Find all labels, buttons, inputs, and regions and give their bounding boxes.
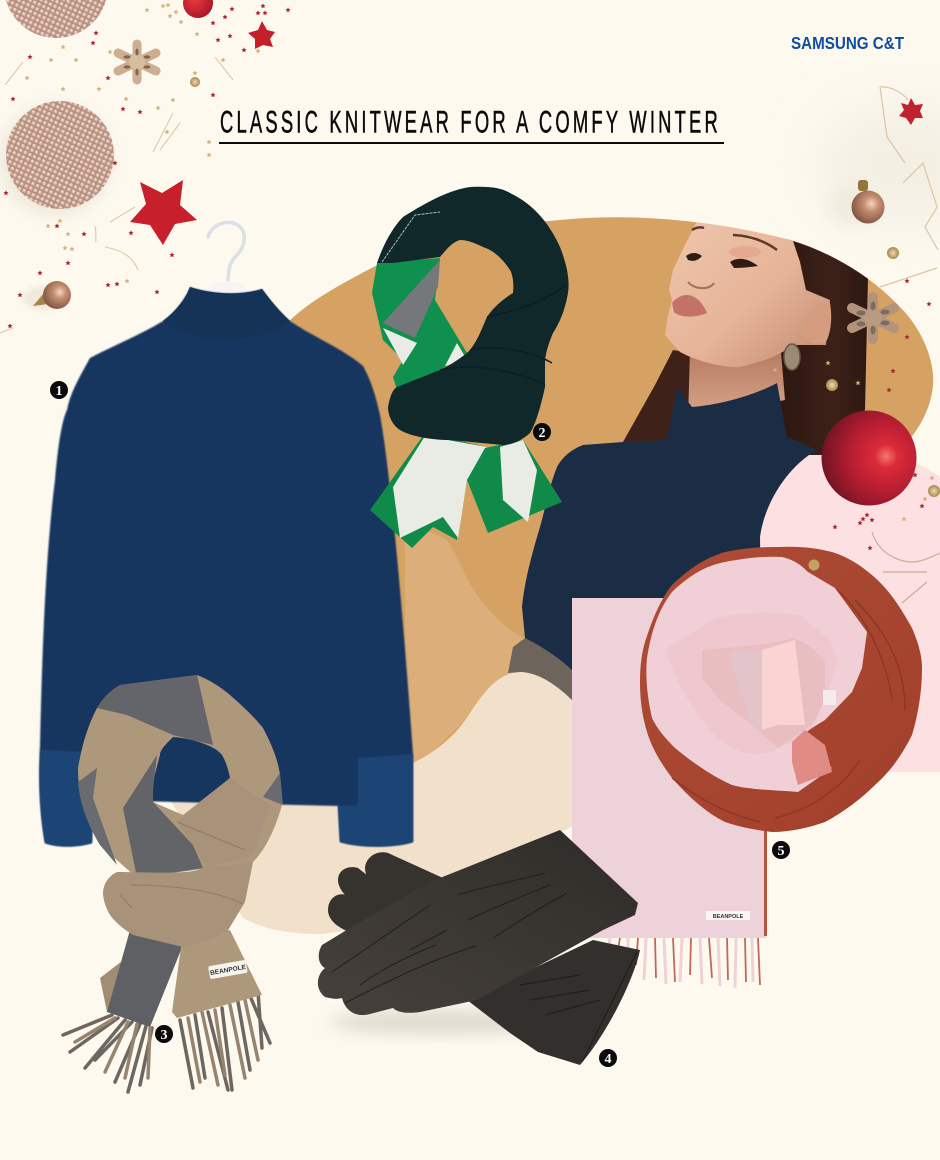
model: right eye [730,259,758,268]
brick loop: small tag [823,690,836,705]
brick loop: inner fold [665,613,838,754]
sweater: left cuff [40,750,93,846]
number 1: 1 [56,384,62,399]
decoration: red confetti stars [3,3,291,328]
decoration: sprigs right [880,87,938,287]
gloves: rear glove [467,940,640,1065]
scarf 2: argyle line [382,212,440,262]
number 5: 5 [778,844,784,859]
decoration: confetti on model and pink panel [772,278,940,550]
decoration: sprigs lower right [872,532,940,603]
decoration: gold confetti stars [24,2,261,283]
number 3 [155,1025,173,1043]
scarf 2: fold lines [440,285,566,385]
scarf 3: beige back tail [100,955,130,1012]
model: left brow [692,227,704,230]
brick loop: hollow [702,638,825,748]
model: neck [688,352,785,407]
model: hair left [623,350,692,445]
decoration: snowflake left [118,44,156,80]
pink scarf: label [706,911,750,920]
model: nose [688,282,714,288]
pink scarf: brick edge [764,820,767,936]
decoration: top-left bauble [4,0,108,38]
model: left eye [686,253,702,261]
brick loop: outer [640,547,922,832]
model: sweater [522,383,817,672]
scarf 3: upper right knot [177,778,270,868]
decoration: large red bauble [822,410,916,506]
model photo [508,215,875,702]
decoration: tiny gold bauble right [887,247,899,259]
gloves: rear glove creases [520,952,637,1062]
number 1 [50,381,68,399]
number 5 [772,841,790,859]
background blob: lighter tan fold [405,520,525,770]
logo: SAMSUNG C&T [791,33,904,53]
background: soft shadow upper right [820,105,940,225]
scarf 3: right fringe [180,992,270,1090]
decoration: small gold bauble [190,77,200,87]
model: head group [623,215,875,455]
decoration: bronze bauble right [828,180,884,225]
scarf 2: left tail white [393,436,487,538]
scarf 3: beige tail [172,930,262,1018]
scarf 3: grey right sliver [263,773,283,805]
model: grey under sweater [508,638,574,702]
sweater: hanger shoulders [203,281,250,292]
scarf 2: right tail white [500,440,537,522]
decoration: red bauble top [183,0,213,18]
scarf 2: white stripe [445,343,467,366]
decoration: gold sprigs left [0,57,233,333]
item 5: pink scarf with brick reverse [572,547,922,988]
number 3: 3 [160,1028,168,1043]
item 1: navy sweater [39,223,413,847]
model: eye shadow [729,246,761,258]
model: hair right [780,240,868,455]
scarf 2: white patch [383,328,417,365]
background blob: tan [285,217,933,770]
scarf 3: grey top band [97,675,213,745]
model: lips [672,295,707,317]
scarf 3: grey tail [107,930,185,1027]
sweater: hanger [208,223,244,284]
background blob: pale pink [760,446,940,772]
brick loop: salmon patch [792,730,832,785]
decoration: beaded red star [130,180,197,245]
sweater: body [39,287,413,846]
background blob: beige [170,672,574,934]
number 4 [599,1049,617,1067]
scarf 2: dark wrap [377,187,569,445]
pink scarf: flat panel [572,598,766,938]
model: ear [809,303,832,344]
scarf 3: grey outer strip [78,768,117,865]
item 2: green argyle scarf [370,187,569,548]
scarf 3: label: BEANPOLE [210,964,247,977]
brick loop: pink wrap [646,557,867,792]
gloves: stitching and pleats [332,873,567,1003]
item 4: leather gloves [318,830,640,1065]
scarf 3: main beige loop [78,675,282,878]
decoration: small red star top [248,21,275,49]
gloves: shadow [330,1010,550,1034]
pink scarf: label: BEANPOLE [713,914,744,920]
pink scarf: fringe pink [606,938,753,988]
brick loop: hollow mid [730,650,762,730]
decoration: large rose-gold bauble [0,101,114,216]
decoration: snowflake right [852,297,894,339]
item 3: taupe and grey scarf [63,675,283,1092]
brick loop: fold lines [672,588,905,822]
scarf 2: right tail green [467,440,562,533]
scarf 2: left tail green [370,433,487,548]
brick loop: hollow light [762,640,805,730]
number 2: 2 [538,426,546,441]
scarf 3: left fringe [63,1015,152,1092]
gloves: back fingers [328,852,443,932]
decoration: small bronze bauble left [23,281,71,310]
number 2 [533,423,551,441]
scarf 3: label [208,960,248,979]
number 4: 4 [604,1052,612,1067]
gloves: main glove [318,830,638,1015]
scarf 3: main knot [103,862,253,947]
sweater: right cuff [338,754,413,846]
model: right brow [733,235,777,250]
pink scarf: fringe brick [616,938,760,985]
model: face [665,215,830,367]
scarf 2: upper green panel [372,258,467,390]
brick loop: button [808,560,820,570]
model: earring [784,344,800,370]
decoration: red star right [899,98,923,125]
sweater: collar rib [163,287,290,339]
scarf 2: grey tweed patch [383,260,440,338]
scarf 3: knot folds [120,822,245,908]
scarf 3: grey centre band [123,755,203,878]
